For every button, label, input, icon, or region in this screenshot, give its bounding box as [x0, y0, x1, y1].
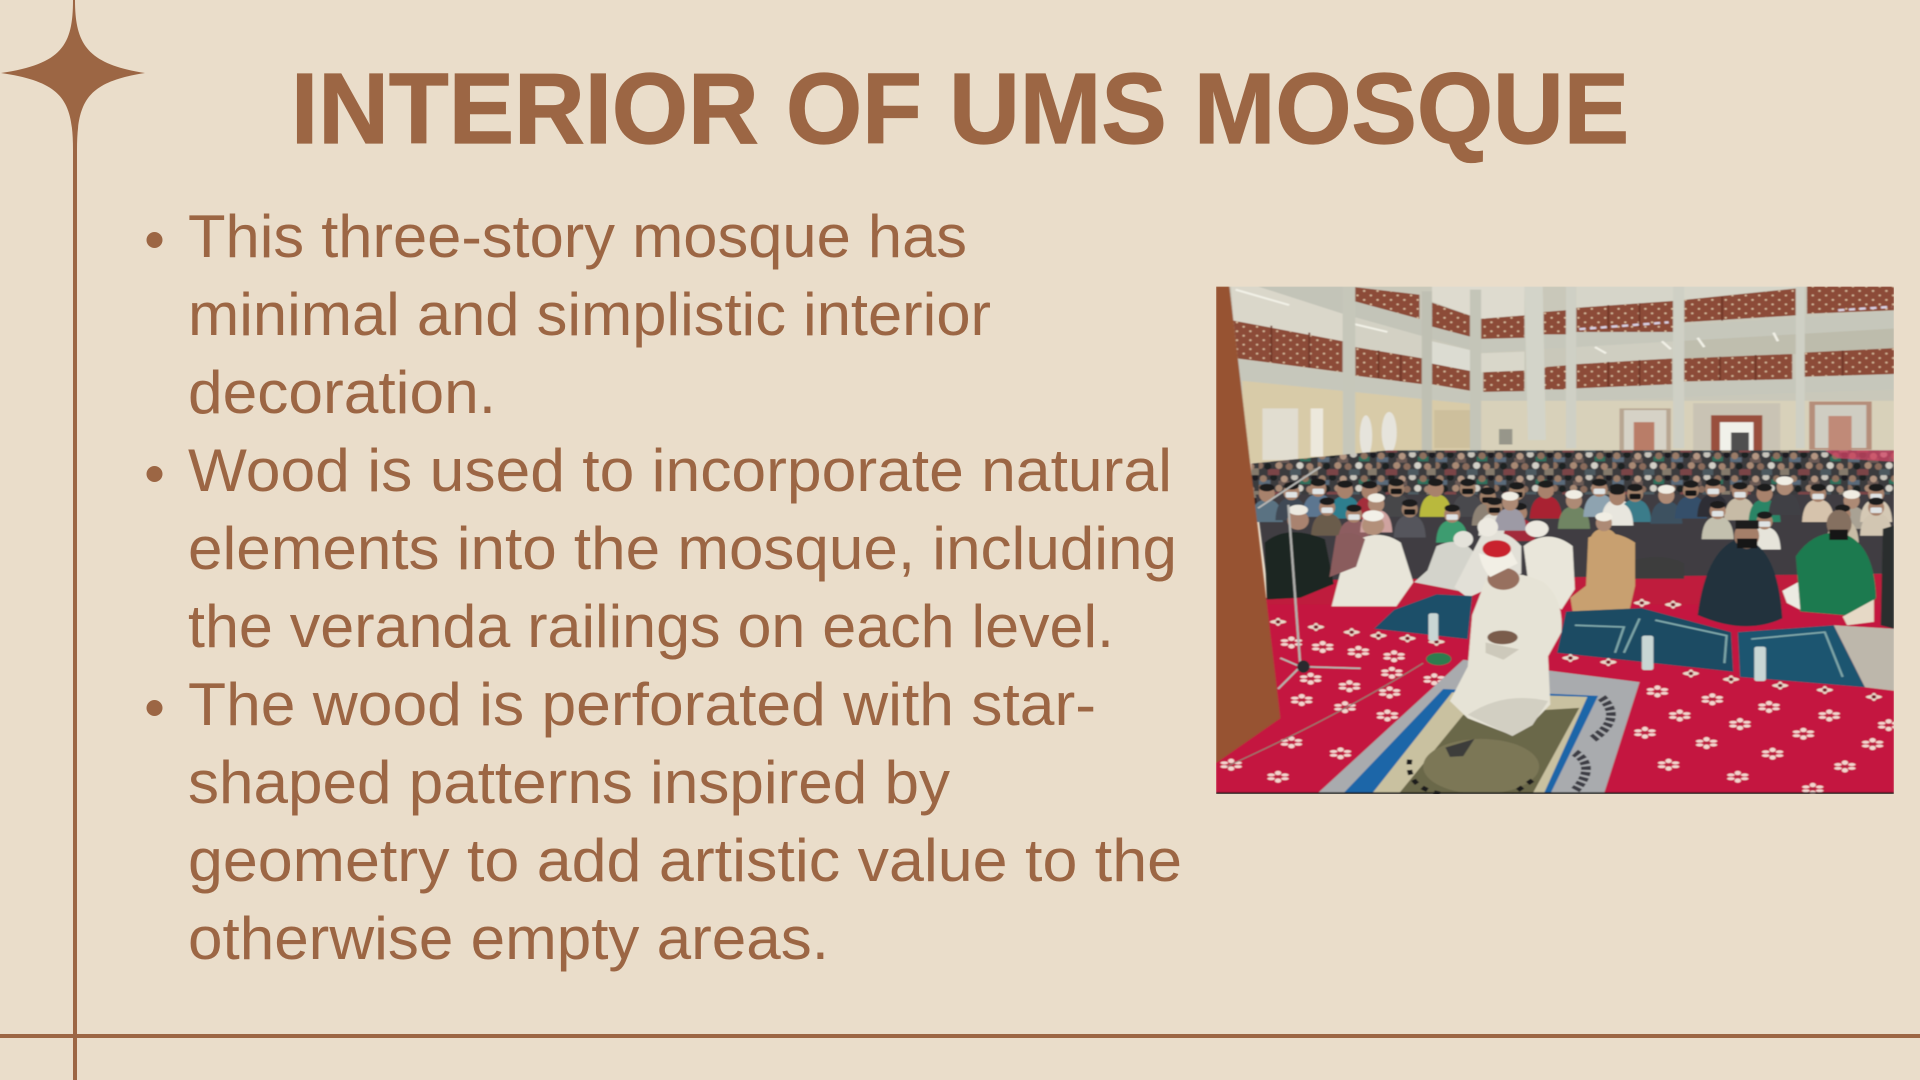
seated crowd	[1251, 450, 1894, 581]
red carpet	[1216, 598, 1894, 794]
bullet 2: the veranda railings on each level.	[188, 593, 1114, 660]
bullet 3: otherwise empty areas.	[188, 905, 829, 972]
decorative star with vertical line	[1, 0, 145, 1080]
bullet 1: decoration.	[188, 359, 496, 426]
bullet 3: geometry to add artistic value to the	[188, 827, 1182, 894]
ground-floor walls and lattice doors	[1242, 381, 1894, 463]
railing posts	[1271, 296, 1843, 387]
bullet 1: This three-story mosque has	[188, 203, 967, 270]
blue prayer mats	[1374, 594, 1894, 691]
upper galleries	[1216, 286, 1894, 459]
beams	[1238, 359, 1481, 404]
title: INTERIOR OF UMS MOSQUE	[291, 53, 1629, 165]
front row figures	[1265, 505, 1894, 629]
water bottles	[1428, 613, 1766, 681]
imam in white robe	[1450, 540, 1562, 736]
photo: congregation inside the mosque	[1216, 286, 1894, 794]
bullet 2: Wood is used to incorporate natural	[188, 437, 1172, 504]
railings	[1233, 286, 1894, 392]
bullet 3: The wood is perforated with star-	[188, 671, 1096, 738]
bullet 2	[146, 437, 1177, 660]
horizontal rule	[0, 1034, 1920, 1038]
carpet flowers	[1221, 599, 1899, 795]
bullet 1: minimal and simplistic interior	[188, 281, 991, 348]
bullet 1	[146, 203, 991, 426]
bullet list	[146, 203, 1182, 972]
microphone stand	[1227, 467, 1451, 766]
columns	[1343, 286, 1805, 455]
middle rows	[1251, 476, 1892, 551]
bullet 2: elements into the mosque, including	[188, 515, 1177, 582]
ceiling lights	[1236, 290, 1778, 353]
wooden pulpit edge	[1216, 286, 1280, 763]
foreground prayer rug	[1317, 660, 1640, 794]
bullet 3	[146, 671, 1182, 972]
bullet 3: shaped patterns inspired by	[188, 749, 950, 816]
